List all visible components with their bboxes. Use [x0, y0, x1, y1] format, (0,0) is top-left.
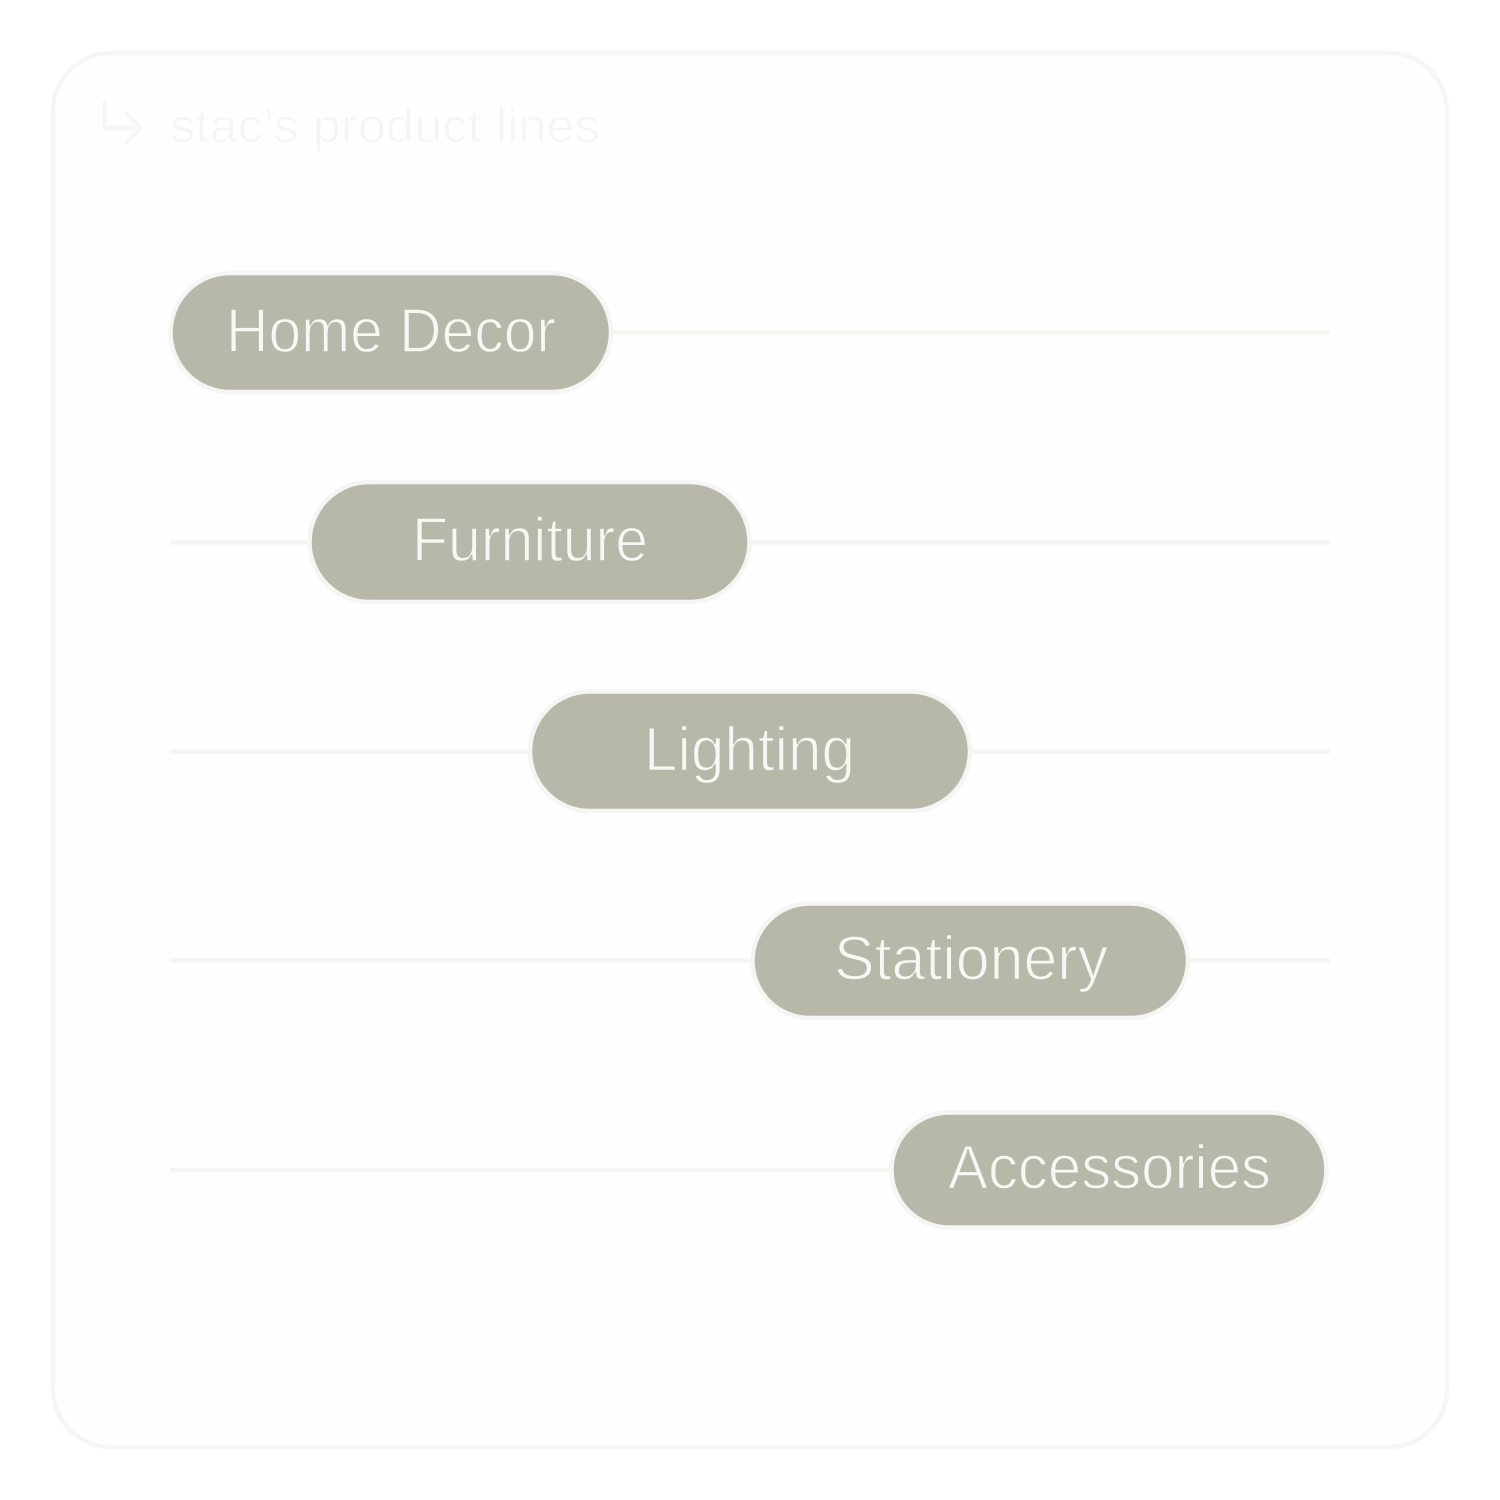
row: Lighting [170, 692, 1330, 811]
row: Home Decor [170, 273, 1330, 392]
row: Furniture: Furniture [412, 506, 648, 575]
heading: stac's product lines: stac’s product lines [170, 99, 600, 152]
row: Accessories: Accessories [948, 1134, 1271, 1202]
row: Furniture [170, 482, 1330, 602]
row: Accessories [170, 1112, 1326, 1228]
row: Lighting: Lighting [644, 716, 855, 784]
row: Home Decor: Home Decor [226, 297, 556, 366]
row: Stationery: Stationery [834, 924, 1108, 994]
icon: down-right arrow [104, 103, 141, 142]
row: Stationery [170, 904, 1330, 1018]
